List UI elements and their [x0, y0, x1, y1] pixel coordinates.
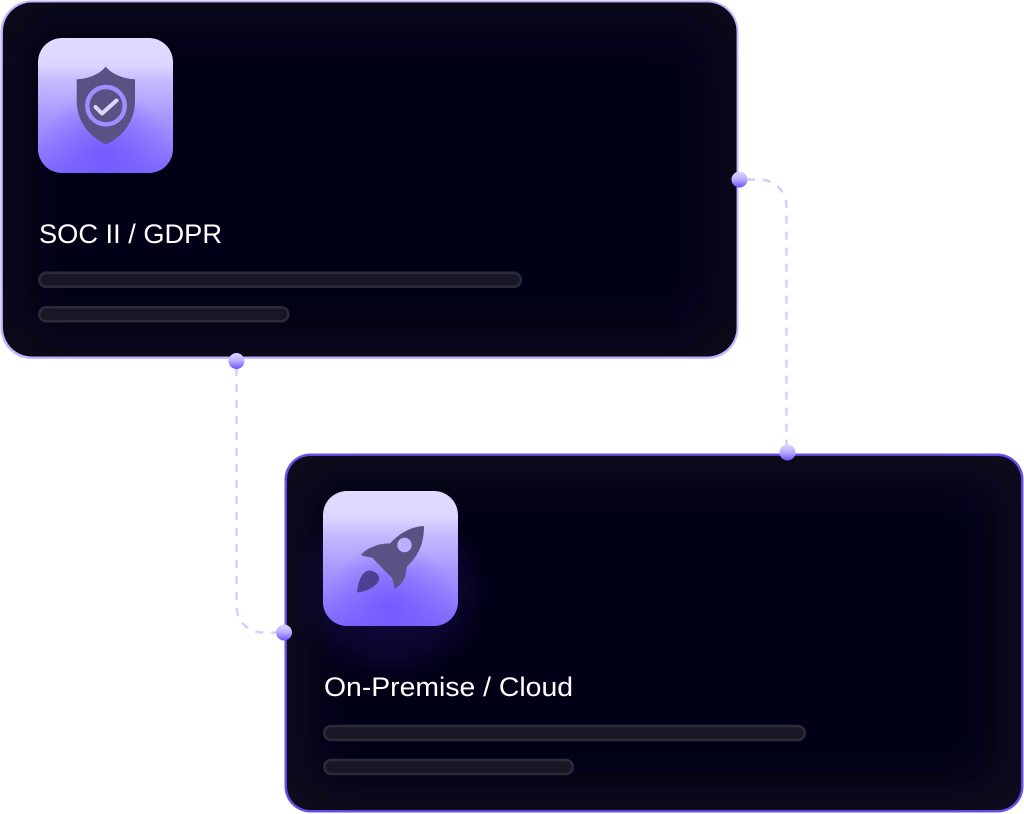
text placeholder bar: short	[324, 760, 573, 774]
text placeholder bar: long	[324, 726, 805, 740]
text placeholder bar: long	[39, 273, 521, 287]
connector node: bottom card left	[276, 624, 292, 640]
connector node: top card bottom	[228, 353, 244, 369]
icon: shield with check	[38, 38, 173, 173]
icon: rocket	[323, 491, 458, 626]
heading: On-Premise / Cloud: On-Premise / Cloud	[324, 672, 573, 702]
connector node: bottom card top	[780, 444, 796, 460]
connector: top card bottom to bottom card left	[236, 368, 278, 633]
panel: SOC II / GDPR	[0, 0, 738, 359]
connector: top card right to bottom card top	[747, 180, 786, 445]
connector node: top card right	[732, 172, 748, 188]
heading: SOC II / GDPR: SOC II / GDPR	[39, 219, 222, 249]
panel: On-Premise / Cloud	[284, 454, 1024, 812]
text placeholder bar: short	[39, 307, 288, 321]
